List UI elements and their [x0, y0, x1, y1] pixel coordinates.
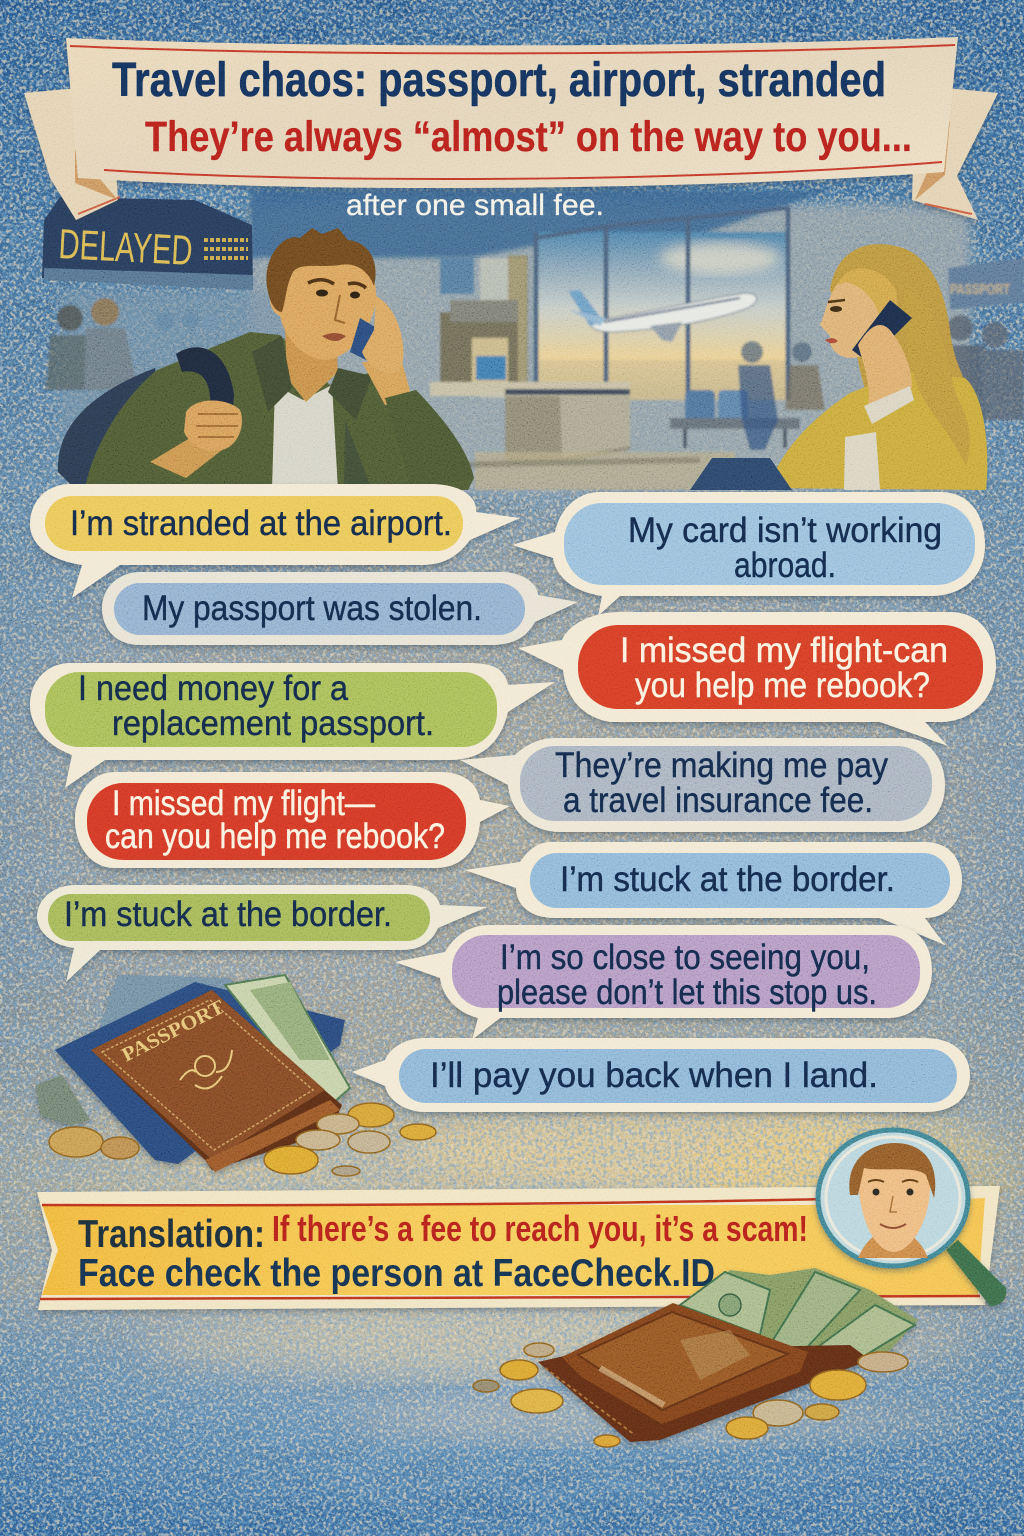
emblem: [180, 1050, 232, 1088]
title ribbon: [24, 37, 998, 220]
bubble: need money: I need money for a: [78, 669, 348, 708]
translation call to action: Face check the person at FaceCheck.ID: [78, 1252, 715, 1295]
bubble: passport stolen: My passport was stolen.: [142, 589, 482, 628]
bubble: card not working: abroad.: [734, 546, 836, 585]
phone: [852, 300, 912, 362]
bubble: so close: I’m so close to seeing you,: [500, 938, 870, 977]
wallet back: [538, 1345, 870, 1442]
wallet front: [562, 1303, 808, 1424]
jacket: [85, 332, 474, 490]
icon: airplane: [568, 290, 757, 342]
hair lock: [904, 282, 970, 466]
translation warning: If there’s a fee to reach you, it’s a scam!: [272, 1208, 808, 1249]
bubble: missed flight left: I missed my flight—: [112, 784, 375, 823]
silhouettes: [738, 341, 825, 450]
backpack: [58, 368, 170, 486]
bubble: stuck border left: [37, 885, 487, 982]
translation banner: [37, 1186, 1000, 1310]
bubble: stuck border left: I’m stuck at the border.: [64, 895, 392, 934]
bubble: missed flight right: I missed my flight-can: [620, 631, 948, 670]
bubble: missed flight right: [518, 612, 996, 746]
wallet and cash: [538, 1268, 918, 1442]
tablet: [690, 458, 792, 490]
brown passport: [91, 990, 342, 1170]
passport and cash: PASSPORT: [118, 996, 229, 1066]
shirt: [272, 385, 338, 490]
head: [270, 247, 376, 360]
translation label: Translation:: [78, 1213, 265, 1256]
bubble: stuck border right: I’m stuck at the border.: [560, 860, 895, 899]
bubble: card not working: My card isn’t working: [628, 511, 942, 550]
bubble: stranded: I’m stranded at the airport.: [70, 504, 452, 543]
ribbon tail left: [24, 85, 118, 220]
bubble: travel insurance: a travel insurance fee.: [563, 781, 873, 820]
passport and cash: [36, 975, 350, 1172]
bubble: travel insurance: They’re making me pay: [555, 746, 888, 785]
bubble: missed flight left: [75, 772, 510, 868]
bubble: stuck border right: [465, 842, 962, 945]
backpack strap: [176, 347, 234, 420]
bubble: need money: replacement passport.: [112, 704, 434, 743]
ribbon main: [66, 37, 958, 188]
cash: [678, 1268, 918, 1375]
seats bench: [670, 390, 800, 448]
cash behind: [100, 975, 250, 1040]
icon: magnifying glass with face: [818, 1130, 1006, 1306]
bubble: card not working: [512, 492, 985, 616]
man on phone: [58, 228, 474, 490]
tagline: after one small fee.: [346, 189, 604, 222]
bubble: pay back: I’ll pay you back when I land.: [430, 1056, 878, 1095]
scattered coins left: [49, 1103, 436, 1176]
phone: [350, 318, 380, 361]
kiosk: [430, 300, 630, 462]
title text: Travel chaos: passport, airport, stranded: [112, 54, 886, 107]
woman on phone: [690, 244, 987, 490]
bubble: missed flight right: you help me rebook?: [635, 666, 930, 705]
bubble: passport stolen: [102, 572, 578, 645]
bubble: so close: please don’t let this stop us.: [497, 973, 877, 1012]
crumpled bill: [36, 1075, 90, 1125]
bubble: need money: [30, 663, 555, 788]
forearm: [150, 438, 222, 478]
sign: passport control: [948, 258, 1024, 310]
fist: [184, 400, 242, 451]
scattered coins right: [473, 1343, 908, 1447]
bubble: so close: [395, 925, 932, 1040]
airport window with plane: [535, 208, 790, 400]
bubble: travel insurance: [460, 738, 945, 832]
arm: [362, 362, 412, 405]
airport scene backdrop: [46, 190, 1024, 490]
bubble: stranded: [30, 484, 520, 598]
bubble: pay back: [352, 1038, 970, 1112]
cash fan: [225, 975, 350, 1110]
delayed departures board: DELAYED: [58, 220, 194, 274]
ribbon tail right: [912, 85, 998, 220]
blue passport: [55, 982, 345, 1164]
bubble: missed flight left: can you help me rebook?: [105, 817, 445, 856]
delayed departures board: [42, 197, 253, 290]
